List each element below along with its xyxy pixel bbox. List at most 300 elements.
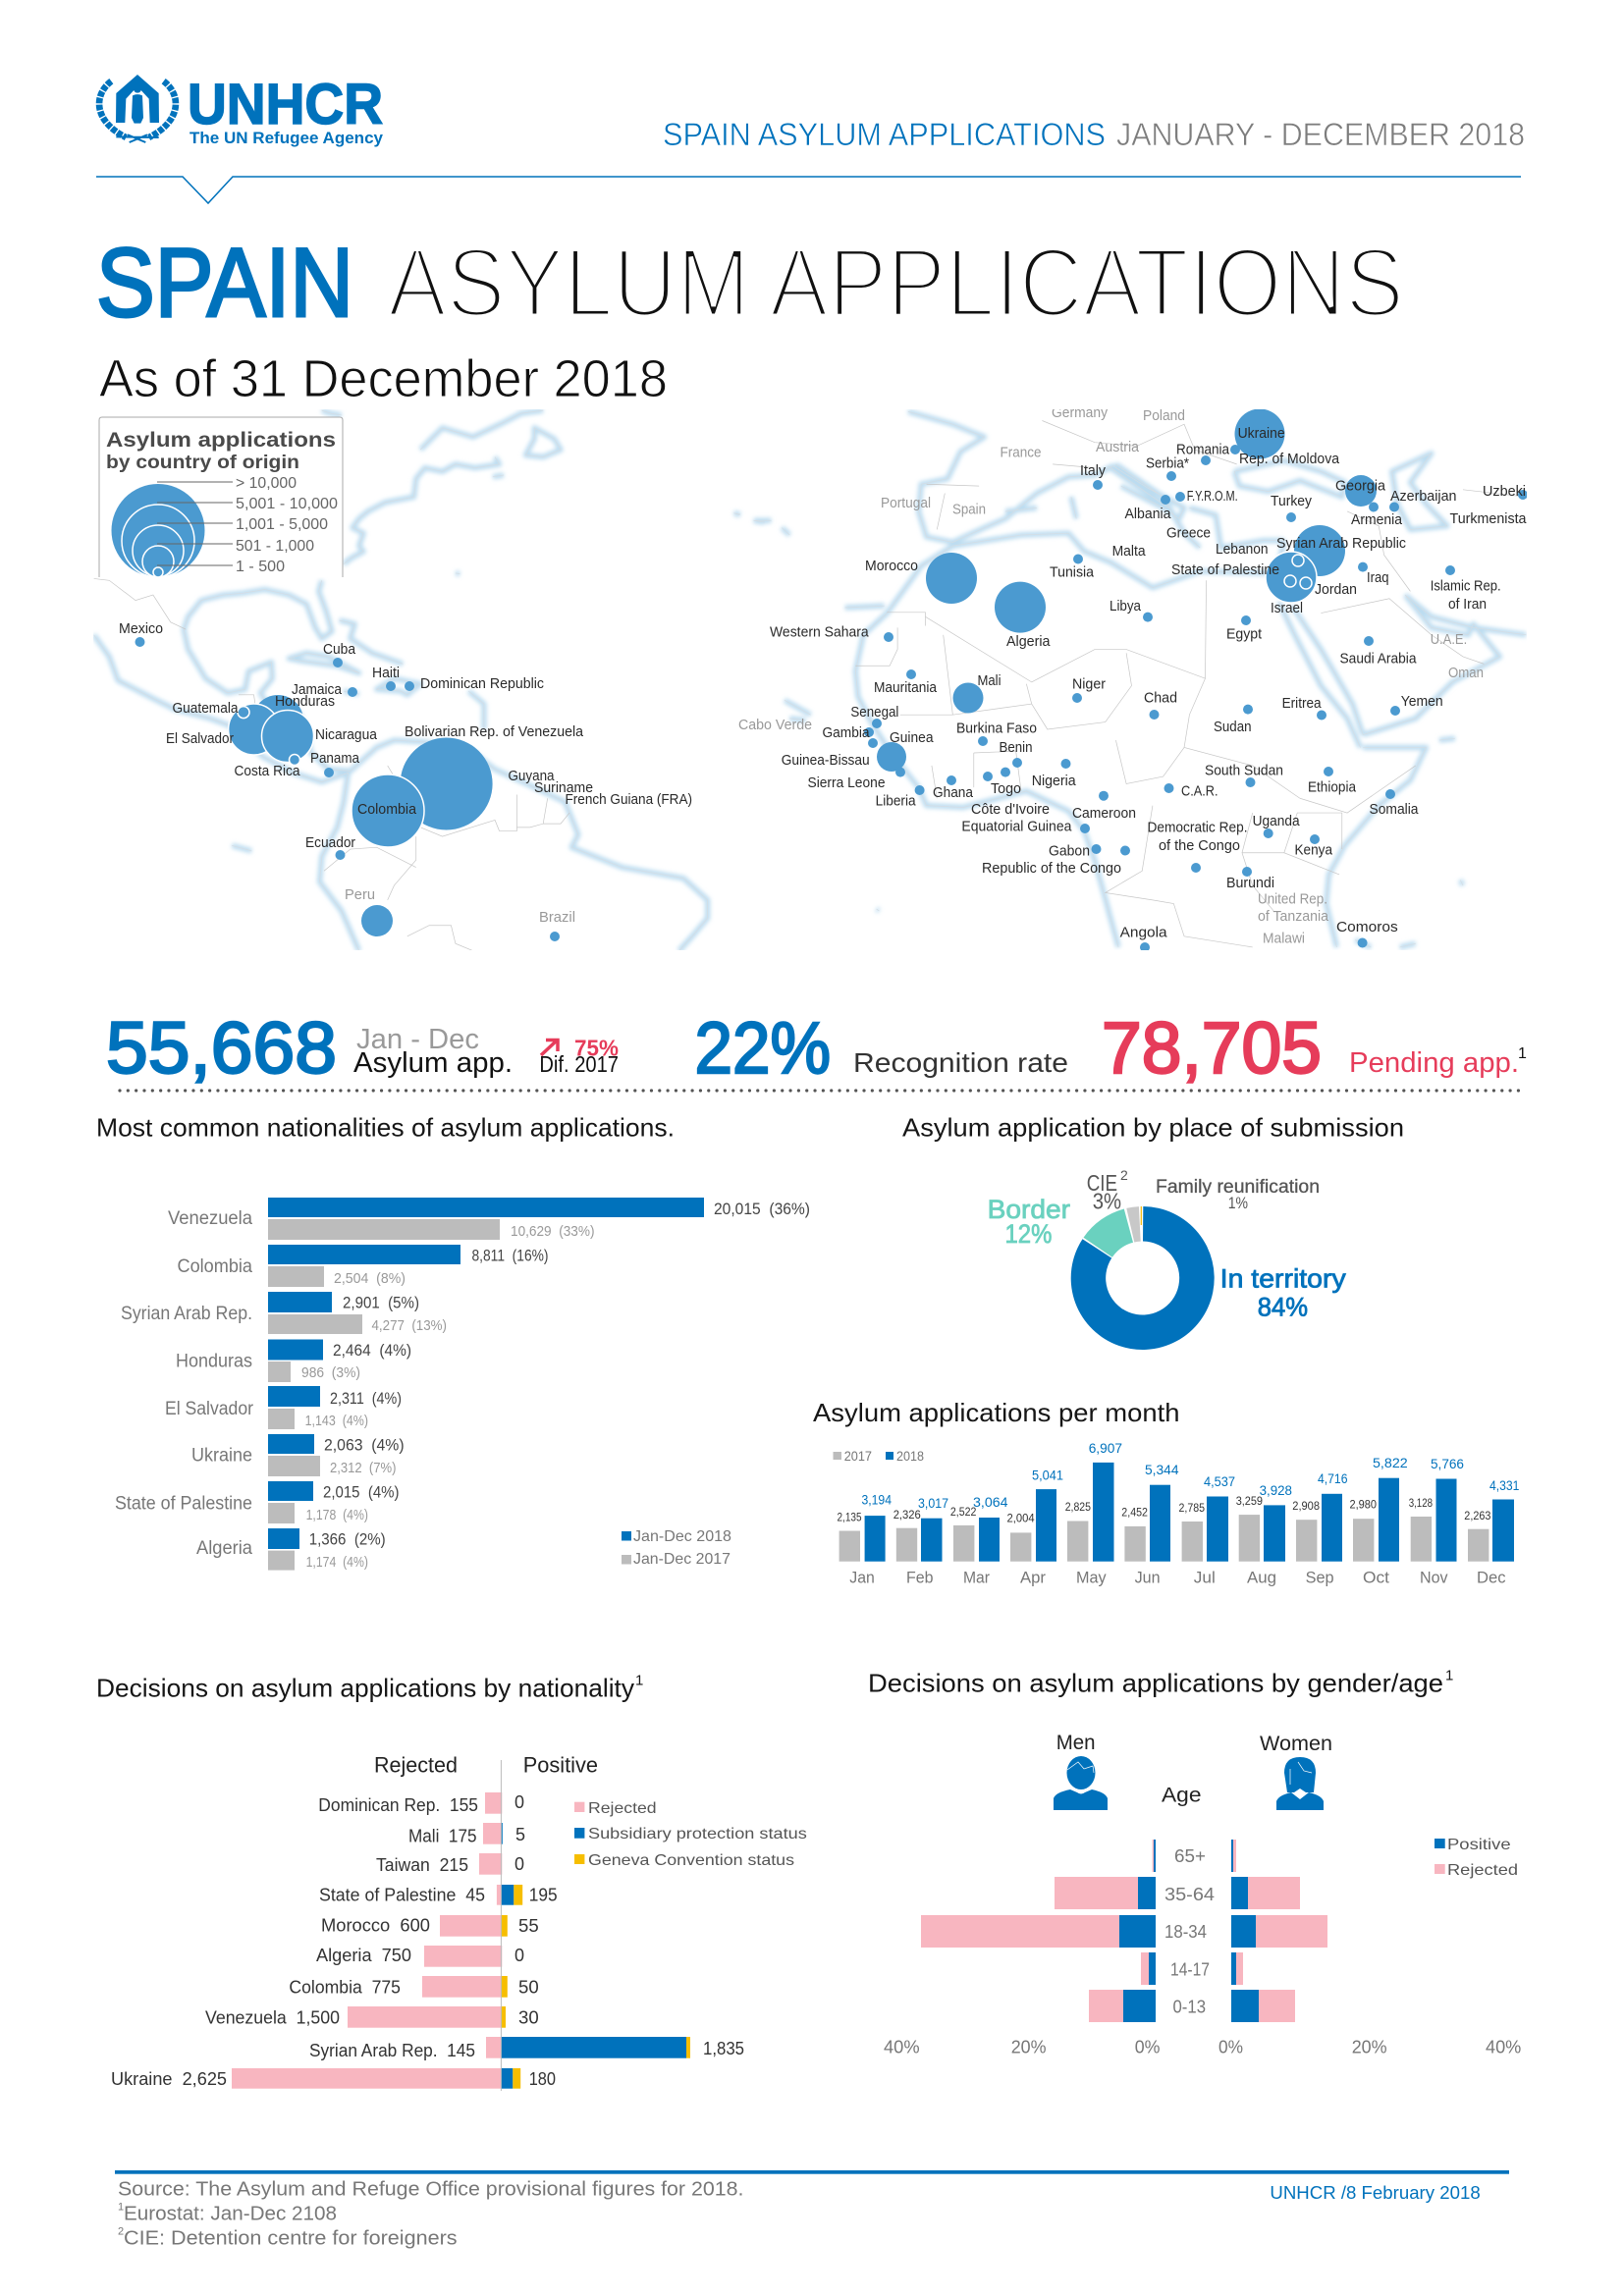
map labels: Europe, Africa, Middle East: Sierra Leone [807,774,886,791]
category labels: El Salvador [165,1399,254,1419]
rejected bars [921,1840,1327,2022]
icon: up arrow [541,1041,558,1055]
axis labels: 0% [1218,2038,1243,2057]
value labels: 986 (3%) [301,1364,360,1381]
KPI: difference with 2017: 75% [574,1035,619,1060]
map labels: Europe, Africa, Middle East: Romania [1176,442,1230,457]
chart legend: 2017 [844,1448,872,1464]
map labels: Americas: El Salvador [166,730,234,747]
positive labels: 180 [529,2069,556,2089]
logo wordmark: UNHCR [188,73,383,136]
map labels: Europe, Africa, Middle East: Israel [1271,600,1303,616]
label: border: Border [988,1195,1070,1224]
month labels: Jan [849,1568,875,1586]
map labels: Europe, Africa, Middle East: Cabo Verde [738,717,812,733]
axis labels [884,2038,1521,2057]
KPI: difference with 2017: Dif. 2017 [539,1051,619,1077]
positive labels: 195 [529,1886,558,1905]
map labels: Americas: Guatemala [173,700,239,717]
map labels: Europe, Africa, Middle East: South Sudan [1205,763,1283,779]
footer notes [118,2179,744,2250]
legend nested circles [112,484,204,577]
category labels: Ukraine [191,1446,252,1467]
age labels: 35-64 [1164,1885,1215,1904]
footer notes: 1 [118,2202,124,2214]
column headers: Positive [523,1753,598,1778]
map labels: Europe, Africa, Middle East: Ethiopia [1308,779,1357,796]
country and rejected labels: Colombia 775 [289,1978,401,1998]
KPI: total asylum applications [106,1007,513,1089]
map labels: Europe, Africa, Middle East: Côte d'Ivoire [971,801,1050,818]
values 2018: 3,064 [973,1494,1008,1510]
map labels: Europe, Africa, Middle East: Egypt [1226,626,1263,642]
heading: decisions by nationality: 1 [635,1673,643,1689]
values 2017: 2,522 [950,1505,977,1519]
heading: decisions by gender and age: 1 [1445,1668,1453,1684]
donut chart: place of submission [988,1167,1346,1350]
label: in territory: 84% [1258,1293,1308,1322]
chart legend: Rejected [1447,1862,1518,1879]
map labels: Europe, Africa, Middle East: Cameroon [1072,805,1136,822]
positive labels: 55 [518,1916,539,1936]
KPI: total asylum applications: 55,668 [106,1007,337,1089]
values 2018: 5,344 [1145,1462,1179,1477]
values 2018: 4,537 [1204,1473,1235,1489]
map labels: Americas: Suriname [534,779,593,796]
map labels: Americas: Costa Rica [234,763,300,779]
map legend [99,417,343,577]
legend box [99,417,343,577]
values 2018: 5,766 [1431,1456,1464,1471]
value labels: 2,901 (5%) [343,1294,419,1312]
map labels: Americas: French Guiana (FRA) [566,791,692,808]
segment: CIE [1126,1206,1141,1243]
column headers [374,1753,598,1778]
map labels: Europe, Africa, Middle East: Algeria [1006,633,1051,650]
map labels: Europe, Africa, Middle East: Tunisia [1050,564,1095,581]
map labels: Europe, Africa, Middle East: Oman [1448,665,1484,681]
map labels: Europe, Africa, Middle East: Turkmenista [1449,510,1527,527]
value labels: 2,312 (7%) [330,1460,397,1476]
chart legend [622,1528,731,1568]
month labels: Aug [1247,1568,1276,1586]
KPI: recognition rate: Recognition rate [853,1047,1068,1078]
map labels: Europe, Africa, Middle East: Libya [1110,598,1142,614]
age labels: 14-17 [1170,1960,1210,1980]
month labels: Mar [963,1568,990,1586]
map labels: Americas [119,620,692,926]
month labels: Dec [1477,1568,1506,1586]
country and rejected labels: Mali 175 [408,1827,477,1846]
values 2017: 2,135 [837,1510,862,1523]
positive labels: 5 [515,1825,525,1844]
map labels: Europe, Africa, Middle East: Albania [1125,506,1171,522]
logo tagline: The UN Refugee Agency [189,129,384,147]
map labels: Europe, Africa, Middle East: Somalia [1369,801,1419,818]
map labels: Americas: Haiti [372,665,400,681]
map labels: Europe, Africa, Middle East: Republic of the Congo [982,860,1121,877]
map labels: Americas: Dominican Republic [420,675,544,692]
chart legend: Geneva Convention status [588,1852,794,1869]
chart legend [833,1448,924,1464]
logo: UNHCR [99,73,384,147]
legend title [106,429,336,473]
category labels: Colombia [177,1256,252,1277]
map labels: Europe, Africa, Middle East: Togo [991,780,1021,797]
map labels: Europe, Africa, Middle East: Burkina Faso [956,721,1037,737]
map labels: Europe, Africa, Middle East: Burundi [1226,875,1274,891]
values 2018: 3,017 [918,1495,948,1511]
positive labels: 0 [514,1854,524,1874]
map labels: Europe, Africa, Middle East: Liberia [876,793,916,810]
values 2018 [862,1440,1520,1511]
label: in territory: In territory [1220,1264,1346,1294]
column headers: Rejected [374,1753,458,1778]
map labels: Europe, Africa, Middle East: Austria [1096,439,1140,455]
country and rejected labels: Ukraine 2,625 [111,2069,227,2089]
KPI: pending applications: Pending app. [1349,1047,1519,1079]
map labels: Americas: Honduras [275,693,335,710]
map labels: Europe, Africa, Middle East [738,404,1527,946]
map labels: Europe, Africa, Middle East: Gabon [1049,843,1090,860]
legend size classes: 501 - 1,000 [236,538,314,555]
value labels: 1,174 (4%) [306,1554,368,1571]
value labels: 2,311 (4%) [330,1389,402,1408]
value labels: 10,629 (33%) [511,1223,595,1240]
map labels: Americas: Bolivarian Rep. of Venezuela [405,723,584,740]
label: family reunification [1156,1177,1320,1212]
axis labels: 20% [1352,2038,1387,2057]
country and rejected labels: Syrian Arab Rep. 145 [309,2041,475,2060]
map labels: Europe, Africa, Middle East: United Rep. [1258,891,1327,907]
map labels: Europe, Africa, Middle East: Malawi [1263,931,1305,946]
map labels: Americas: Colombia [357,801,417,818]
values 2018: 4,331 [1489,1477,1520,1493]
map labels: Europe, Africa, Middle East: Georgia [1335,477,1386,495]
map labels: Europe, Africa, Middle East: Portugal [881,495,931,511]
chart legend [574,1800,807,1869]
heading: decisions by gender and age: Decisions on asylum applications by gender/age [868,1668,1443,1697]
map labels: Europe, Africa, Middle East: Jordan [1315,581,1357,598]
segment: family reunification [1140,1206,1142,1225]
label: family reunification: 1% [1228,1194,1248,1212]
map labels: Europe, Africa, Middle East: Ghana [933,784,974,801]
map labels: Europe, Africa, Middle East: Benin [1000,739,1033,756]
heading: place of submission: Asylum application by place of submission [902,1113,1404,1143]
country and rejected labels: Morocco 600 [321,1916,430,1936]
bars 2017 [268,1219,500,1571]
map labels: Europe, Africa, Middle East: Yemen [1401,693,1443,710]
population pyramid: decisions by gender and age [884,1732,1521,2057]
month labels: Oct [1363,1568,1389,1586]
panel: map of countries of origin [94,404,1528,952]
map labels: Americas: Mexico [119,620,163,637]
chart legend: Jan-Dec 2018 [633,1528,731,1545]
label: family reunification: Family reunification [1156,1177,1320,1198]
value labels [301,1200,810,1571]
header strapline [663,117,1525,152]
country and rejected labels: Dominican Rep. 155 [318,1795,478,1815]
map labels: Europe, Africa, Middle East: U.A.E. [1431,631,1467,648]
map labels: Europe, Africa, Middle East: Saudi Arabia [1339,651,1417,667]
chart legend: Positive [1447,1837,1511,1853]
gender and age headers [1056,1732,1332,1807]
values 2017: 3,259 [1236,1494,1263,1508]
footer date: UNHCR /8 February 2018 [1270,2183,1481,2203]
title: ASYLUM APPLICATIONS [388,228,1404,337]
map labels: Europe, Africa, Middle East: Islamic Rep. [1431,578,1501,595]
map labels: Europe, Africa, Middle East: Greece [1166,525,1211,542]
map labels: Europe, Africa, Middle East: Gambia [823,724,870,741]
legend size classes [236,475,338,575]
month labels: Apr [1020,1568,1046,1586]
KPI: difference with 2017 [539,1035,619,1077]
map borders [94,420,1526,951]
legend leader lines [157,482,233,565]
map labels: Americas: Nicaragua [315,726,378,743]
label: in territory [1220,1264,1346,1322]
age labels: 0-13 [1172,1998,1206,2017]
map labels: Americas: Panama [310,750,360,767]
values 2017: 2,785 [1178,1501,1205,1515]
map labels: Europe, Africa, Middle East: of the Congo [1159,837,1240,854]
values 2017: 2,908 [1292,1499,1320,1513]
map labels: Americas: Jamaica [292,681,343,698]
map labels: Europe, Africa, Middle East: Italy [1080,462,1106,479]
month labels: Feb [906,1568,933,1586]
label: CIE: 2 [1120,1167,1128,1183]
age labels: 18-34 [1164,1922,1207,1942]
country and rejected labels: Algeria 750 [316,1946,411,1965]
map labels: Europe, Africa, Middle East: Ukraine [1238,425,1285,442]
map labels: Europe, Africa, Middle East: Iraq [1367,569,1388,586]
values 2017: 2,980 [1349,1498,1377,1512]
values 2017: 2,452 [1121,1506,1148,1520]
map labels: Europe, Africa, Middle East: Lebanon [1216,541,1269,558]
map labels: Europe, Africa, Middle East: Azerbaijan [1390,488,1457,505]
age labels: 65+ [1174,1846,1206,1866]
axis labels: 40% [1486,2038,1521,2057]
month labels: May [1076,1568,1107,1586]
category labels: Algeria [196,1538,252,1559]
column chart: applications per month [833,1440,1520,1586]
segment: border [1084,1209,1133,1257]
map labels: Europe, Africa, Middle East: Democratic Rep. [1147,820,1247,836]
values 2017: 2,004 [1007,1511,1035,1524]
map labels: Europe, Africa, Middle East: Senegal [850,704,898,721]
map labels: Europe, Africa, Middle East: Poland [1143,407,1185,424]
geneva convention bars [501,1885,690,2089]
positive bars [1119,1840,1259,2022]
values 2018: 3,928 [1260,1482,1292,1498]
chart legend [1435,1837,1518,1879]
KPI: total asylum applications: Jan - Dec [356,1024,479,1055]
footer rule [115,2170,1509,2174]
map labels: Europe, Africa, Middle East: of Tanzania [1258,908,1329,925]
map coastlines [94,410,1526,951]
map labels: Europe, Africa, Middle East: Uganda [1253,813,1300,829]
columns 2018 [865,1463,1514,1562]
map labels: Americas: Cuba [323,641,356,658]
title: SPAIN [96,228,353,337]
icon: UNHCR emblem [99,75,176,142]
positive labels: 0 [514,1792,524,1812]
value labels: 2,015 (4%) [323,1483,399,1502]
month labels: Jun [1135,1568,1161,1586]
footer notes: 2 [118,2226,124,2238]
map labels: Europe, Africa, Middle East: of Iran [1448,596,1487,613]
bar chart: nationalities [115,1198,810,1571]
map labels: Europe, Africa, Middle East: Niger [1072,675,1106,693]
map labels: Europe, Africa, Middle East: Sudan [1214,719,1251,735]
value labels: 20,015 (36%) [714,1200,810,1218]
header rule with notch [96,177,1521,203]
legend size classes: 1 - 500 [236,559,285,575]
month labels: Nov [1420,1568,1448,1586]
map labels: Europe, Africa, Middle East: Chad [1144,690,1177,707]
columns 2017 [839,1515,1489,1562]
legend size classes: > 10,000 [236,475,297,492]
map labels: Europe, Africa, Middle East: Mauritania [874,679,938,696]
values 2018: 5,041 [1032,1467,1063,1482]
segment: in territory [1071,1206,1215,1350]
map labels: Europe, Africa, Middle East: Mali [978,672,1001,689]
map labels: Europe, Africa, Middle East: Guinea [890,729,934,746]
map labels: Europe, Africa, Middle East: Nigeria [1032,773,1076,789]
label: border [988,1195,1070,1249]
gender and age headers: Men [1056,1732,1096,1754]
values 2017: 2,326 [893,1508,921,1522]
positive labels: 50 [518,1978,539,1998]
map labels: Europe, Africa, Middle East: F.Y.R.O.M. [1187,488,1238,505]
map labels: Europe, Africa, Middle East: Comoros [1336,919,1398,935]
age labels [1164,1846,1215,2017]
subsidiary protection bars [501,1823,686,2089]
value labels: 2,063 (4%) [324,1435,405,1455]
value labels: 2,464 (4%) [333,1341,411,1360]
map labels: Europe, Africa, Middle East: Syrian Arab Republic [1276,535,1406,552]
footer notes: Source: The Asylum and Refuge Office provisional figures for 2018. [118,2179,744,2201]
category labels [115,1208,254,1559]
month labels: Sep [1306,1568,1334,1586]
subtitle date: As of 31 December 2018 [99,349,668,408]
map labels: Europe, Africa, Middle East: Turkey [1271,493,1312,509]
map labels: Europe, Africa, Middle East: Eritrea [1282,695,1322,712]
values 2017: 2,263 [1464,1509,1491,1522]
KPI: pending applications [1102,1007,1527,1089]
map labels: Europe, Africa, Middle East: Rep. of Moldova [1239,451,1340,467]
footer notes: Eurostat: Jan-Dec 2108 [124,2204,337,2225]
map labels: Americas: Brazil [539,909,575,926]
legend title: by country of origin [106,453,299,473]
KPI: total asylum applications: Asylum app. [353,1047,513,1079]
values 2017: 2,825 [1065,1500,1091,1514]
positive labels: 1,835 [703,2039,744,2058]
map labels: Europe, Africa, Middle East: Kenya [1294,842,1333,859]
month labels [849,1568,1506,1586]
map labels: Europe, Africa, Middle East: Armenia [1351,511,1403,528]
country and rejected labels: State of Palestine 45 [319,1886,485,1905]
legend size classes: 1,001 - 5,000 [236,516,328,533]
map labels: Europe, Africa, Middle East: Equatorial Guinea [961,819,1072,834]
country and rejected labels [111,1795,485,2089]
values 2018: 6,907 [1089,1440,1122,1456]
map labels: Europe, Africa, Middle East: Guinea-Bissau [782,752,870,769]
legend title: Asylum applications [106,429,336,452]
category labels: Venezuela [168,1208,252,1229]
values 2018: 4,716 [1318,1470,1348,1486]
label: CIE: CIE [1087,1170,1117,1196]
KPI: recognition rate: 22% [695,1007,831,1089]
map labels: Americas: Guyana [509,768,555,784]
map labels: Europe, Africa, Middle East: Uzbeki [1483,483,1526,500]
gender and age headers: Women [1260,1733,1332,1755]
diverging bar chart: decisions by nationality [111,1753,807,2091]
map circles: Europe, Africa, Middle East [864,408,1528,952]
map labels: Americas: Peru [345,886,375,903]
map labels: Europe, Africa, Middle East: Morocco [865,558,918,574]
KPI: recognition rate [695,1007,1068,1089]
header strapline: JANUARY - DECEMBER 2018 [1116,117,1525,152]
value labels: 1,178 (4%) [306,1507,368,1523]
values 2018: 3,194 [862,1492,892,1508]
label: CIE: 3% [1093,1189,1121,1214]
footer notes: CIE: Detention centre for foreigners [124,2228,458,2250]
KPI: pending applications: 78,705 [1102,1007,1322,1089]
label: CIE [1087,1167,1128,1214]
icon: woman [1276,1757,1324,1810]
legend size classes: 5,001 - 10,000 [236,496,338,512]
values 2017 [837,1494,1491,1524]
KPI: pending applications: 1 [1518,1045,1527,1062]
axis labels: 40% [884,2038,920,2057]
chart legend: Jan-Dec 2017 [633,1551,731,1568]
map circles: Americas [135,637,560,941]
values 2018: 5,822 [1373,1455,1408,1470]
country and rejected labels: Taiwan 215 [376,1855,468,1875]
bars 2018 [268,1198,704,1549]
label: border: 12% [1005,1219,1052,1249]
positive labels: 0 [514,1946,524,1965]
header strapline: SPAIN ASYLUM APPLICATIONS [663,117,1106,152]
chart legend: 2018 [896,1448,924,1464]
map labels: Europe, Africa, Middle East: Germany [1052,404,1108,421]
value labels: 4,277 (13%) [371,1317,447,1334]
map labels: Europe, Africa, Middle East: Angola [1120,925,1167,941]
map labels: Europe, Africa, Middle East: Western Sahara [770,624,869,641]
value labels: 8,811 (16%) [471,1247,548,1264]
map labels: Europe, Africa, Middle East: Serbia* [1146,455,1189,472]
category labels: Syrian Arab Rep. [121,1304,252,1324]
gender and age headers: Age [1162,1785,1202,1807]
map labels: Europe, Africa, Middle East: State of Palestine [1171,561,1279,578]
category labels: Honduras [176,1352,252,1372]
axis labels: 20% [1011,2038,1047,2057]
map labels: Europe, Africa, Middle East: C.A.R. [1181,783,1218,800]
values 2017: 3,128 [1409,1496,1433,1510]
axis labels: 0% [1135,2038,1160,2057]
heading: applications per month: Asylum applications per month [813,1398,1180,1427]
icon: man [1054,1756,1108,1810]
positive labels: 30 [518,2008,539,2028]
value labels: 2,504 (8%) [334,1270,406,1287]
value labels: 1,366 (2%) [309,1529,386,1549]
chart legend: Subsidiary protection status [588,1826,807,1842]
country and rejected labels: Venezuela 1,500 [205,2008,340,2028]
chart legend: Rejected [588,1800,657,1817]
map labels: Europe, Africa, Middle East: France [1000,444,1041,461]
month labels: Jul [1194,1568,1216,1586]
